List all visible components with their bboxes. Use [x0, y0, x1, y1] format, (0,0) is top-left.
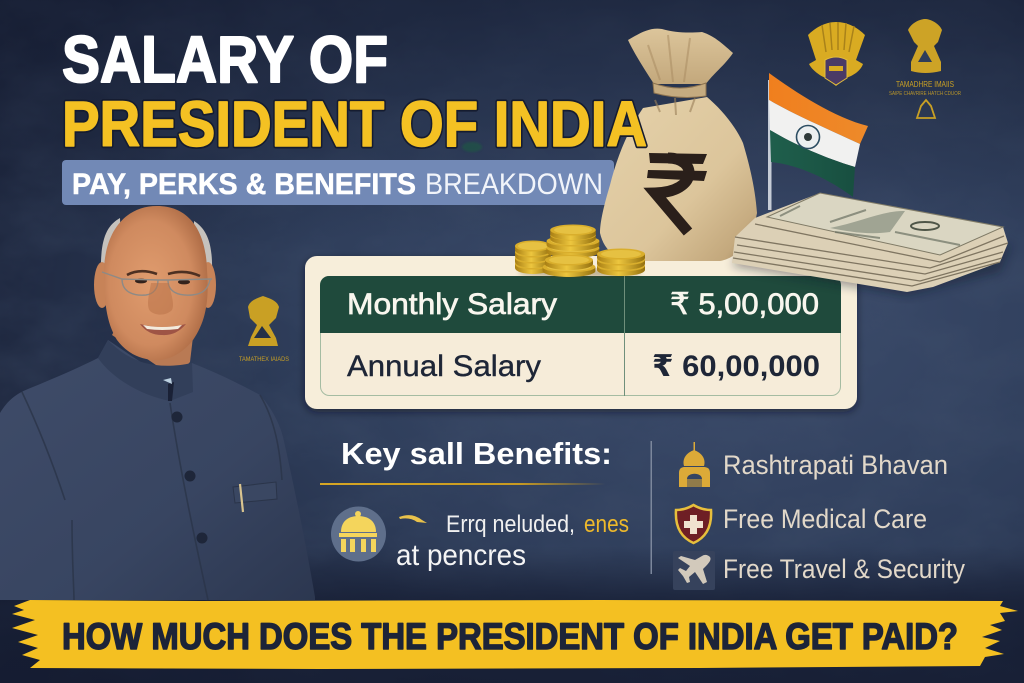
emblem: national crest with caption: SAIPE CHAVRIRE HATCH CDUOR [889, 91, 961, 97]
portrait of the president [0, 206, 315, 600]
heading: salary of: SALARY OF [62, 22, 388, 96]
icon: stack of banknotes [732, 193, 1012, 296]
ears [94, 262, 110, 308]
nose [148, 283, 173, 315]
annual salary label: Annual Salary [347, 350, 541, 383]
icon: medical shield [676, 505, 711, 543]
icon: money bag [600, 29, 757, 261]
jacket seams [22, 392, 282, 600]
icon: small arrow [399, 515, 427, 523]
benefit: free medical care: Free Medical Care [723, 504, 927, 534]
icon: indian flag [768, 73, 868, 210]
buttons [172, 412, 182, 422]
monthly salary label: Monthly Salary [347, 288, 557, 321]
annual salary value: ₹ 60,00,000 [652, 350, 820, 383]
glasses [102, 272, 212, 295]
benefit: free travel and security: Free Travel & Security [723, 554, 965, 584]
face [104, 206, 208, 360]
small emblem beside portrait [239, 296, 290, 363]
icon: gold coins [515, 224, 645, 277]
benefit note text: at pencres [396, 539, 526, 572]
heading: key benefits: Key sall Benefits: [341, 436, 612, 471]
heading: president of india: PRESIDENT OF INDIA [62, 88, 647, 160]
pen [240, 484, 243, 512]
benefit: rashtrapati bhavan: Rashtrapati Bhavan [723, 450, 948, 480]
monthly salary value: ₹ 5,00,000 [670, 288, 819, 321]
smile [140, 324, 186, 335]
benefit: rashtrapati bhavan [679, 442, 948, 487]
jacket [0, 340, 315, 600]
bottom banner [12, 600, 1018, 669]
divider [650, 441, 652, 574]
benefit: free medical care [676, 504, 927, 543]
benefit: free travel and security [673, 551, 965, 590]
icon: dome building [331, 506, 386, 562]
neck [112, 320, 195, 378]
eyes [135, 279, 147, 283]
brows [127, 271, 200, 276]
icon: rupee symbol on bag [647, 153, 707, 232]
emblem: national crest with caption [889, 19, 961, 118]
header row [320, 276, 841, 333]
emblem: gold crest [808, 22, 865, 86]
pocket [233, 482, 277, 503]
salary table card [305, 256, 857, 409]
hair [101, 218, 212, 275]
collar [98, 340, 193, 401]
subtitle pill [62, 160, 614, 205]
benefit note text: Errq neluded, [446, 511, 575, 538]
emblem: national crest with caption: TAMADHRE IMAIIS [896, 80, 954, 89]
small emblem beside portrait: TAMATHEX IAIADS [239, 356, 290, 363]
table body [320, 276, 840, 396]
subtitle pill: BREAKDOWN [425, 168, 603, 201]
benefit note text: enes [584, 511, 629, 538]
benefit note text [396, 511, 629, 572]
heading: president of india: PRESIDENT OF INDIA [62, 88, 647, 160]
subtitle pill: PAY, PERKS & BENEFITS [72, 168, 416, 201]
icon: temple dome [679, 442, 710, 487]
icon: airplane tile [673, 551, 715, 590]
